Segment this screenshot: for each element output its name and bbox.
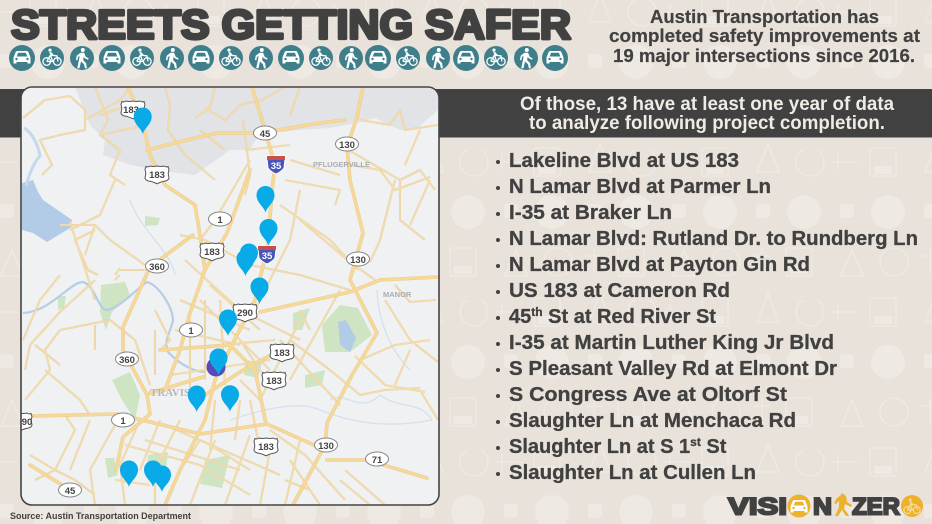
map: state route markers: 1 xyxy=(120,416,126,427)
icon row: car, bike and pedestrian badges xyxy=(9,45,568,71)
map: state route markers: 45 xyxy=(65,486,76,497)
list of intersections: S Congress Ave at Oltorf St xyxy=(509,384,787,406)
Vision Zero logo: N xyxy=(813,494,832,520)
map: interstate 35 shields: 35 xyxy=(271,161,282,172)
map: place labels: PFLUGERVILLE xyxy=(313,160,370,169)
list of intersections: St xyxy=(701,436,727,458)
map: US highway shields: 183 xyxy=(204,247,220,258)
map: US highway shields: 183 xyxy=(266,376,282,387)
Vision Zero logo: VISI xyxy=(728,494,787,520)
map: state route markers: 360 xyxy=(119,355,135,366)
intro text: completed safety improvements at xyxy=(609,25,920,46)
map: interstate 35 shields xyxy=(206,156,285,376)
map: US highway shields: 183 xyxy=(149,170,165,181)
list of intersections: Slaughter Ln at Menchaca Rd xyxy=(509,410,796,432)
map: lakes and rivers xyxy=(22,128,432,424)
list of intersections: N Lamar Blvd at Payton Gin Rd xyxy=(509,254,810,276)
list of intersections: S Pleasant Valley Rd at Elmont Dr xyxy=(509,358,837,380)
map: state route markers: 130 xyxy=(350,255,366,266)
Vision Zero logo xyxy=(728,493,923,520)
list of intersections: 45 xyxy=(509,306,531,328)
list of intersections: N Lamar Blvd at Parmer Ln xyxy=(509,176,771,198)
band text xyxy=(520,94,894,134)
list of intersections: th xyxy=(531,305,543,319)
title: STREETS GETTING SAFER xyxy=(11,2,571,48)
list of intersections xyxy=(496,150,918,484)
dark band xyxy=(0,89,932,138)
map: state route markers xyxy=(58,126,388,497)
list of intersections: Lakeline Blvd at US 183 xyxy=(509,150,739,172)
Vision Zero logo: ZER xyxy=(852,494,900,520)
band text: to analyze following project completion. xyxy=(529,113,885,134)
map: US highway shields: 290 xyxy=(237,308,253,319)
list of intersections: st xyxy=(690,435,701,449)
map: state route markers: 1 xyxy=(188,326,194,337)
map: US highway shields: 183 xyxy=(123,105,139,116)
map: major roads xyxy=(30,87,438,505)
map: state route markers: 1 xyxy=(217,215,223,226)
map: parks xyxy=(58,216,372,488)
map: state route markers: 45 xyxy=(260,129,271,140)
list of intersections: Slaughter Ln at S 1 xyxy=(509,436,690,458)
list of intersections: I-35 at Martin Luther King Jr Blvd xyxy=(509,332,834,354)
map: state route markers: 71 xyxy=(372,455,383,466)
map: state route markers: 360 xyxy=(149,262,165,273)
source note: Source: Austin Transportation Department xyxy=(10,511,191,521)
map: intersection pins xyxy=(120,108,278,492)
list of intersections: I-35 at Braker Ln xyxy=(509,202,672,224)
band text: Of those, 13 have at least one year of data xyxy=(520,94,894,115)
map: US highway shields: 183 xyxy=(258,442,274,453)
map: state route markers: 130 xyxy=(318,441,334,452)
map: US highway shields: 90 xyxy=(22,417,32,428)
map: place labels xyxy=(150,160,412,399)
map: place labels: TRAVIS xyxy=(150,387,190,399)
map: US highway shields xyxy=(8,101,294,456)
list of intersections: N Lamar Blvd: Rutland Dr. to Rundberg Ln xyxy=(509,228,918,250)
map: minor roads xyxy=(23,87,438,505)
list of intersections: St at Red River St xyxy=(543,306,716,328)
map: place labels: MANOR xyxy=(383,290,412,299)
intro text: Austin Transportation has xyxy=(650,6,879,27)
map: US highway shields: 183 xyxy=(274,348,290,359)
intro text xyxy=(609,6,920,66)
map: interstate 35 shields: 35 xyxy=(262,251,273,262)
map panel xyxy=(8,87,439,505)
map: urban grey area xyxy=(75,87,438,175)
intro text: 19 major intersections since 2016. xyxy=(613,45,915,66)
list of intersections: Slaughter Ln at Cullen Ln xyxy=(509,462,756,484)
map: state route markers: 130 xyxy=(339,140,355,151)
list of intersections: US 183 at Cameron Rd xyxy=(509,280,730,302)
